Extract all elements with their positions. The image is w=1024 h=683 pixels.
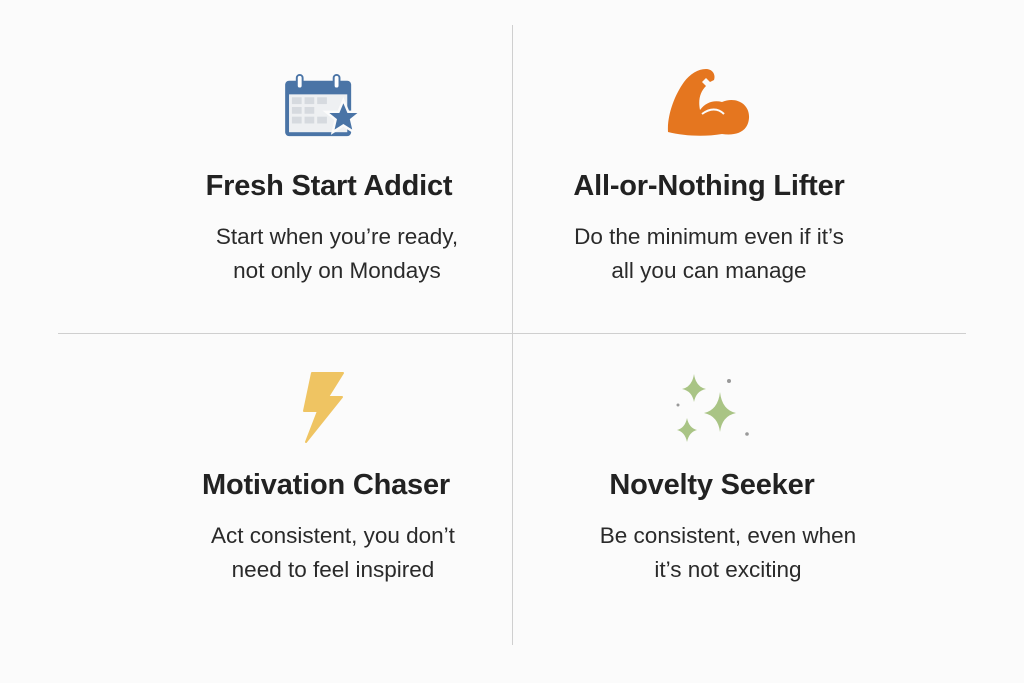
icon: lightning bolt — [303, 372, 344, 443]
text: motivation: need to feel inspired — [232, 557, 434, 582]
text: fresh start — [216, 224, 458, 283]
title: All-or-Nothing Lifter: All-or-Nothing Lifter — [573, 170, 845, 202]
title: Novelty Seeker: Novelty Seeker — [609, 469, 815, 501]
icon: calendar with star — [285, 74, 358, 136]
icon: flexed bicep — [668, 69, 750, 136]
text: fresh start: Start when you’re ready, — [216, 224, 458, 249]
text: all-or-nothing: all you can manage — [611, 258, 807, 283]
text: motivation — [211, 523, 455, 582]
text: all-or-nothing: Do the minimum even if it’s — [574, 224, 844, 249]
text: novelty: it’s not exciting — [654, 557, 802, 582]
text: all-or-nothing — [574, 224, 844, 283]
title: Fresh Start Addict: Fresh Start Addict — [206, 170, 452, 202]
title: Motivation Chaser: Motivation Chaser — [202, 469, 450, 501]
text: fresh start: not only on Mondays — [233, 258, 441, 283]
text: novelty: Be consistent, even when — [600, 523, 856, 548]
text: motivation: Act consistent, you don’t — [211, 523, 455, 548]
text: novelty — [600, 523, 856, 582]
icon: sparkles — [676, 374, 749, 442]
